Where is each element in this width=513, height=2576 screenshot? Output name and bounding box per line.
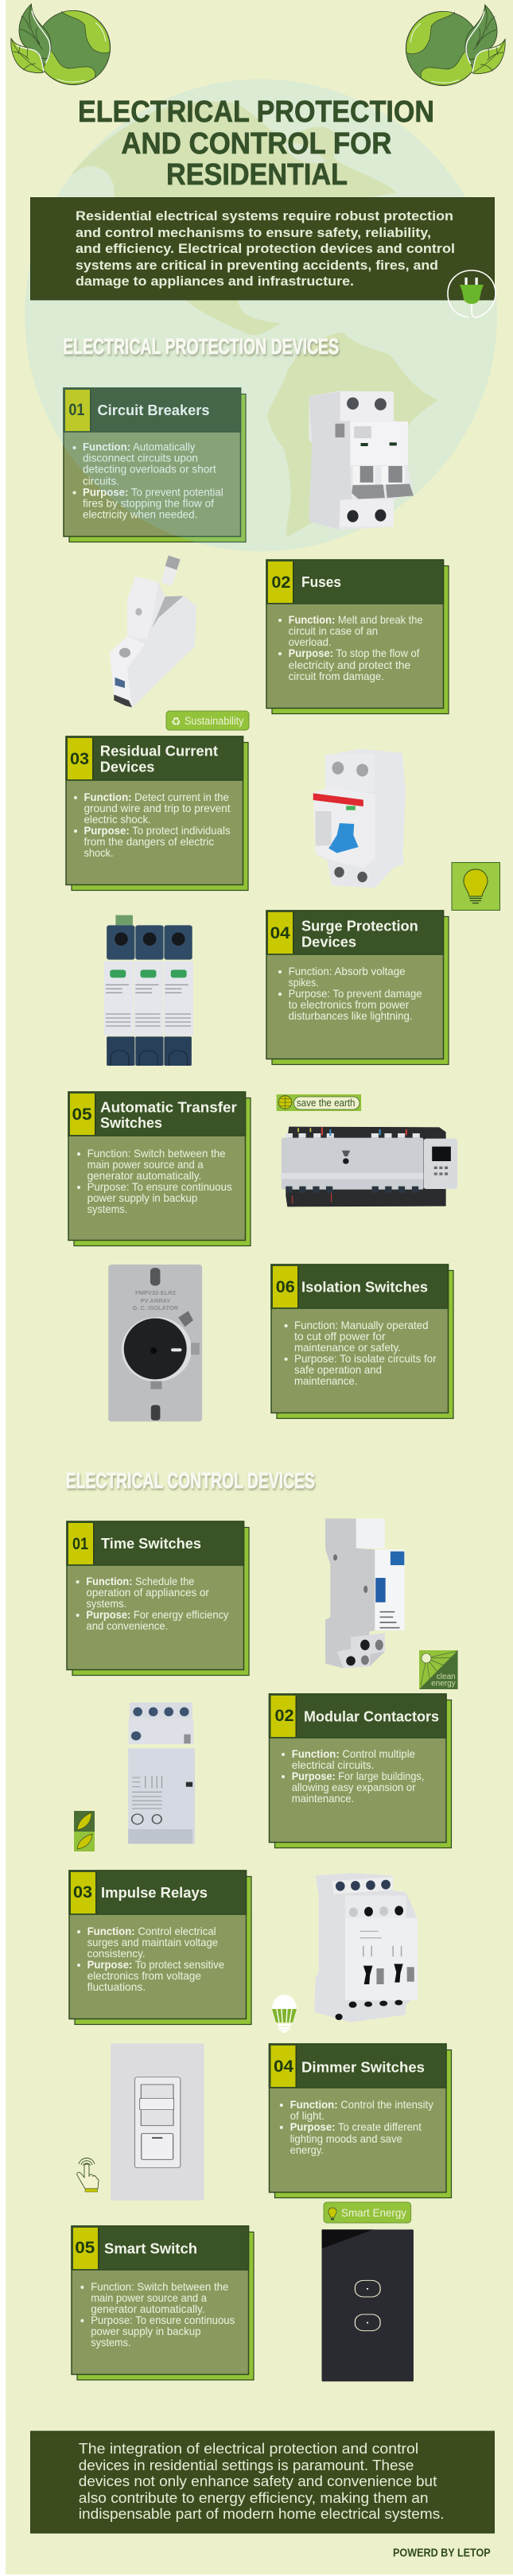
description list xyxy=(74,791,231,859)
description list: lighting moods and save xyxy=(290,2132,402,2145)
description list: maintenance. xyxy=(292,1792,354,1805)
photo: isolation switch xyxy=(108,1265,202,1421)
description list: Purpose: For large buildings, xyxy=(292,1770,424,1782)
card frame xyxy=(67,1521,249,1675)
panel: Circuit Breakers card xyxy=(64,388,246,542)
description list: overload. xyxy=(289,635,332,648)
heading: Fuses xyxy=(301,574,341,590)
heading: Automatic Transfer xyxy=(100,1100,237,1116)
description list: generator automatically. xyxy=(91,2302,205,2315)
badge: Smart Energy xyxy=(324,2202,411,2223)
description list: circuit from damage. xyxy=(289,670,384,682)
heading: Modular Contactors xyxy=(304,1708,439,1724)
photo: isolation switch: D. C. ISOLATOR xyxy=(133,1304,179,1311)
panel: introduction xyxy=(30,197,495,300)
card frame xyxy=(269,1694,452,1848)
description list: Function: Manually operated xyxy=(294,1319,429,1331)
description list: Function: Absorb voltage xyxy=(289,965,406,977)
footer credit: POWERD BY LETOP xyxy=(393,2547,491,2559)
number: 03 xyxy=(70,750,89,768)
number: 03 xyxy=(73,1883,92,1902)
description list: electrical circuits. xyxy=(292,1758,374,1771)
badge: clean energy xyxy=(419,1650,458,1689)
heading: Devices xyxy=(100,760,154,775)
badge: clean energy: clean xyxy=(437,1673,456,1681)
badge: save the earth xyxy=(277,1094,361,1111)
heading xyxy=(301,919,418,950)
description list: to cut off power for xyxy=(294,1330,386,1342)
heading: Circuit Breakers xyxy=(97,402,210,418)
description list: Function: Detect current in the xyxy=(84,791,229,803)
description list: surges and maintain voltage xyxy=(87,1936,218,1949)
photo: smart switch xyxy=(322,2229,414,2381)
description list xyxy=(76,1575,228,1632)
description list: systems. xyxy=(86,1597,126,1610)
description list: Purpose: To ensure continuous xyxy=(91,2314,235,2326)
photo: automatic transfer switch xyxy=(281,1127,457,1206)
description list: Purpose: To prevent damage xyxy=(289,987,422,1000)
description list: of light. xyxy=(290,2109,325,2122)
number: 04 xyxy=(270,924,290,942)
description list: disturbances like lightning. xyxy=(289,1009,413,1022)
icon: leaf tile xyxy=(74,1811,95,1851)
heading xyxy=(100,1100,237,1131)
description list xyxy=(285,1319,437,1387)
card frame xyxy=(271,1265,453,1419)
description list: safe operation and xyxy=(294,1363,382,1376)
heading: Surge Protection xyxy=(301,919,418,934)
panel: Modular Contactors card xyxy=(269,1694,452,1848)
panel: conclusion xyxy=(30,2431,495,2533)
heading: Isolation Switches xyxy=(301,1279,428,1295)
description list: Function: Switch between the xyxy=(87,1147,226,1160)
title xyxy=(78,95,434,192)
title: AND CONTROL FOR xyxy=(121,127,391,161)
panel: Automatic Transfer Switches card xyxy=(68,1092,251,1245)
card frame xyxy=(64,388,246,542)
panel: introduction: and control mechanisms to ensure safety, reliability, xyxy=(76,225,431,240)
description list xyxy=(77,1147,232,1215)
description list: maintenance. xyxy=(294,1374,357,1387)
number: 04 xyxy=(274,2057,293,2076)
badge: clean energy: energy xyxy=(431,1680,456,1688)
heading: electrical protection devices: ELECTRICAL PROTECTION DEVICES xyxy=(63,334,339,359)
panel: introduction: and efficiency. Electrical protection devices and control xyxy=(76,241,455,256)
description list: disconnect circuits upon xyxy=(83,452,198,464)
description list: detecting overloads or short xyxy=(83,463,216,476)
description list: from the dangers of electric xyxy=(84,835,214,848)
heading: Residual Current xyxy=(100,744,218,760)
heading: electrical control devices: ELECTRICAL CONTROL DEVICES xyxy=(66,1468,315,1493)
description list: electric shock. xyxy=(84,813,151,826)
title: RESIDENTIAL xyxy=(166,158,348,192)
icon: hand tapping xyxy=(77,2158,99,2192)
description list: Function: Melt and break the xyxy=(289,613,423,626)
description list: operation of appliances or xyxy=(86,1586,209,1599)
number: 02 xyxy=(275,1707,294,1725)
photo: modular contactor xyxy=(128,1703,195,1844)
description list xyxy=(280,2098,433,2156)
heading: Impulse Relays xyxy=(101,1885,208,1901)
card frame xyxy=(266,560,449,714)
description list: Purpose: To protect individuals xyxy=(84,824,231,837)
panel: conclusion: also contribute to energy efficiency, making them an xyxy=(79,2489,429,2506)
panel: Dimmer Switches card xyxy=(269,2044,452,2198)
card frame xyxy=(269,2044,452,2198)
description list: fluctuations. xyxy=(87,1980,146,1993)
icon: globe with leaves, right xyxy=(406,5,505,86)
description list: Purpose: To stop the flow of xyxy=(289,647,419,659)
description list: Function: Control electrical xyxy=(87,1925,216,1937)
card frame xyxy=(69,1871,251,2025)
panel: Smart Switch card xyxy=(72,2226,254,2380)
number: 05 xyxy=(75,2239,95,2257)
description list: Purpose: To isolate circuits for xyxy=(294,1352,437,1365)
photo: surge protection device xyxy=(104,915,193,1066)
photo: isolation switch: FMPV32-ELR2 xyxy=(135,1289,176,1296)
icon: plug xyxy=(448,270,496,317)
photo: dimmer switch xyxy=(111,2043,204,2201)
photo: isolation switch: PV ARRAY xyxy=(141,1297,170,1304)
card frame xyxy=(66,736,248,891)
description list xyxy=(278,613,423,682)
number: 06 xyxy=(276,1278,295,1296)
description list: electricity and protect the xyxy=(289,659,410,671)
description list: Function: Schedule the xyxy=(86,1575,195,1587)
card frame xyxy=(72,2226,254,2380)
badge: save the earth: save the earth xyxy=(297,1098,356,1109)
heading xyxy=(100,744,218,775)
description list: ground wire and trip to prevent xyxy=(84,802,231,814)
heading: Smart Switch xyxy=(104,2240,197,2256)
number: 05 xyxy=(72,1105,92,1124)
description list: power supply in backup xyxy=(87,1191,197,1204)
heading: Switches xyxy=(100,1115,162,1131)
panel: Isolation Switches card xyxy=(271,1265,453,1419)
panel: conclusion: The integration of electrical protection and control xyxy=(79,2440,418,2457)
panel: Surge Protection Devices card xyxy=(266,911,449,1064)
description list: Purpose: To ensure continuous xyxy=(87,1180,232,1193)
badge: Sustainability: Sustainability xyxy=(185,715,244,727)
panel: conclusion: devices not only enhance safety and convenience but xyxy=(79,2473,437,2489)
description list: shock. xyxy=(84,846,113,859)
description list: Purpose: To prevent potential xyxy=(83,486,223,499)
number: 01 xyxy=(72,1535,88,1553)
description list: Function: Switch between the xyxy=(91,2280,229,2293)
photo: fuse holder xyxy=(110,555,196,708)
description list: and convenience. xyxy=(86,1619,168,1632)
description list xyxy=(73,441,223,521)
icon: light bulb tile xyxy=(452,862,499,910)
description list: circuit in case of an xyxy=(289,624,378,637)
photo: time switch xyxy=(325,1518,405,1669)
description list: Function: Control multiple xyxy=(292,1747,415,1760)
description list: spikes. xyxy=(289,976,319,989)
badge: Sustainability xyxy=(166,711,249,730)
description list: consistency. xyxy=(87,1947,146,1960)
description list: systems. xyxy=(87,1203,127,1215)
badge: Sustainability: ♻ xyxy=(171,716,181,729)
description list: main power source and a xyxy=(87,1158,204,1171)
panel: Fuses card xyxy=(266,560,449,714)
heading: Devices xyxy=(301,934,356,950)
description list: main power source and a xyxy=(91,2291,207,2304)
description list xyxy=(282,1747,424,1805)
description list: Function: Automatically xyxy=(83,441,195,453)
panel: introduction: systems are critical in preventing accidents, fires, and xyxy=(76,258,438,273)
description list: allowing easy expansion or xyxy=(292,1781,416,1793)
panel: Time Switches card xyxy=(67,1521,249,1675)
icon: globe with leaves, left xyxy=(11,4,111,85)
panel: Impulse Relays card xyxy=(69,1871,251,2025)
title: ELECTRICAL PROTECTION xyxy=(78,95,434,129)
icon: white LED bulb xyxy=(272,1995,297,2033)
panel: conclusion: indispensable part of modern home electrical systems. xyxy=(79,2505,445,2522)
description list: power supply in backup xyxy=(91,2325,201,2337)
photo: residual current device xyxy=(313,749,406,888)
description list: electronics from voltage xyxy=(87,1969,201,1982)
description list: circuits. xyxy=(83,475,119,488)
description list: fires by stopping the flow of xyxy=(83,497,214,510)
photo: impulse relay xyxy=(314,1873,418,2022)
heading: Dimmer Switches xyxy=(301,2059,425,2075)
description list: Function: Control the intensity xyxy=(290,2098,433,2111)
number: 01 xyxy=(68,401,85,419)
description list: generator automatically. xyxy=(87,1169,201,1182)
panel: Residual Current Devices card xyxy=(66,736,248,891)
description list: energy. xyxy=(290,2143,324,2156)
description list: to electronics from power xyxy=(289,998,409,1011)
description list xyxy=(278,965,422,1022)
description list: systems. xyxy=(91,2336,130,2349)
background globe xyxy=(25,80,497,552)
description list: electricity when needed. xyxy=(83,508,197,521)
panel: introduction: damage to appliances and infrastructure. xyxy=(76,274,354,289)
heading: Time Switches xyxy=(101,1536,201,1552)
panel: conclusion: devices in residential settings is paramount. These xyxy=(79,2457,414,2473)
badge: Smart Energy: Smart Energy xyxy=(341,2206,406,2219)
card frame xyxy=(68,1092,251,1245)
card frame xyxy=(266,911,449,1064)
description list: Purpose: To create different xyxy=(290,2120,422,2133)
number: 02 xyxy=(271,573,290,592)
description list: Purpose: For energy efficiency xyxy=(86,1608,228,1621)
description list: maintenance or safety. xyxy=(294,1341,401,1354)
photo: miniature circuit breaker xyxy=(309,391,414,530)
description list xyxy=(80,2280,235,2349)
description list xyxy=(77,1925,224,1993)
description list: Purpose: To protect sensitive xyxy=(87,1958,224,1971)
panel: introduction: Residential electrical systems require robust protection xyxy=(76,208,453,223)
